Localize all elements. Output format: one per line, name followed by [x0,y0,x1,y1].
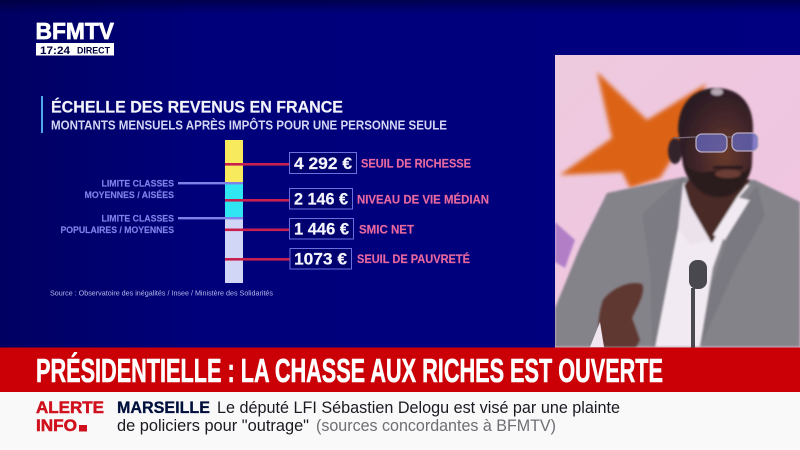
value: poverty threshold: SEUIL DE PAUVRETÉ [357,253,470,266]
class limit labels [60,178,174,236]
chart: income scale [60,140,489,283]
heading: chart title: MONTANTS MENSUELS APRÈS IMPÔTS POUR UNE PERSONNE SEULE [51,117,447,132]
value: wealth threshold [290,152,471,174]
glasses [674,133,758,152]
alert text [117,398,620,435]
class limit labels: MOYENNES / AISÉES [84,190,174,201]
value: net minimum wage: 1 446 € [294,220,349,238]
logo: BFMTV direct: BFMTV [36,18,115,44]
class limit markers [178,182,243,219]
scale bar [225,140,243,283]
alert label: INFO [36,416,77,435]
value: median standard of living [290,188,489,209]
alert label: ALERTE [36,398,104,417]
source note: Source : Observatoire des inégalités / Insee / Ministère des Solidarités [50,288,273,298]
photo: studio guest [555,55,800,348]
value: wealth threshold: 4 292 € [294,155,352,173]
class limit labels: LIMITE CLASSES [102,178,174,190]
alert text: (sources concordantes à BFMTV) [316,416,556,435]
value: net minimum wage [290,218,414,239]
value: poverty threshold [290,248,470,269]
value: median standard of living: 2 146 € [294,190,348,208]
microphone [689,260,707,348]
logo: BFMTV direct: DIRECT [77,46,110,56]
shirt and neck [655,170,750,347]
background star [560,72,706,188]
logo: BFMTV direct [36,18,115,57]
class limit labels: LIMITE CLASSES [102,214,174,224]
cuff [590,322,604,347]
hand [599,283,643,347]
heading: chart title [41,96,447,133]
alert text: Le député LFI Sébastien Delogu est visé par une plainte [217,398,620,417]
head [668,88,753,197]
value: poverty threshold: 1073 € [294,250,347,268]
threshold lines [225,163,290,261]
value: wealth threshold: SEUIL DE RICHESSE [361,158,471,170]
class limit labels: POPULAIRES / MOYENNES [60,225,174,236]
value: net minimum wage: SMIC NET [359,224,414,236]
alert text: MARSEILLE [117,398,210,417]
jacket [555,177,800,347]
logo: BFMTV direct: 17:24 [40,45,71,57]
ticker: alert info [0,392,800,450]
value: median standard of living: NIVEAU DE VIE MÉDIAN [357,194,489,206]
alert label [36,398,104,435]
heading: chart title: ÉCHELLE DES REVENUS EN FRANCE [51,98,343,116]
alert text: de policiers pour "outrage" [117,416,309,435]
